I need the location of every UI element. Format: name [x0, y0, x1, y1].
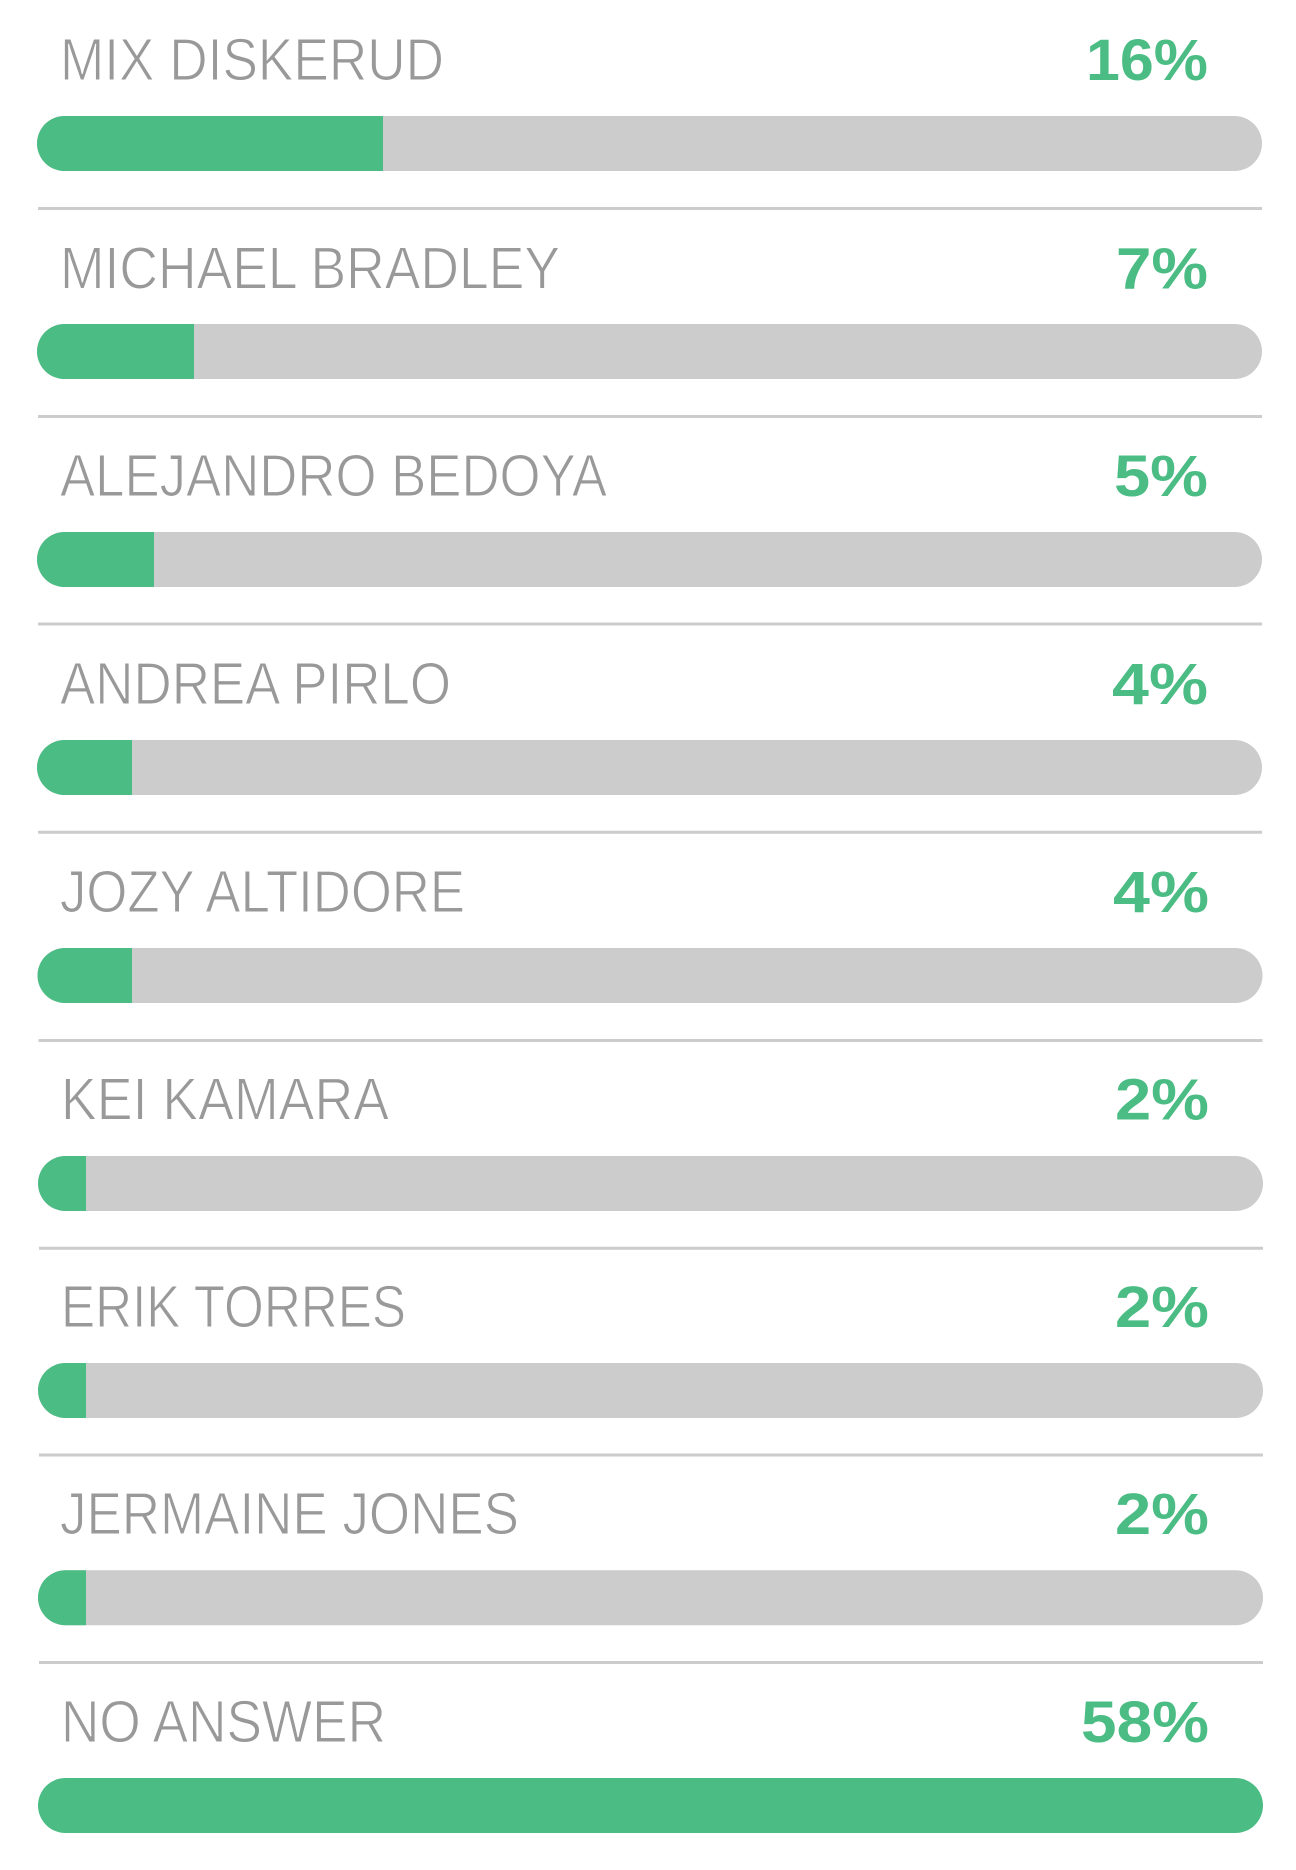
row: Mix Diskerud [37, 27, 1262, 171]
value: 2% [1115, 1275, 1209, 1340]
row: Jermaine Jones [38, 1481, 1263, 1625]
bar track [37, 532, 1262, 587]
bar fill [37, 116, 383, 171]
bar fill [37, 948, 132, 1003]
label: ERIK TORRES [61, 1274, 406, 1340]
bar track [38, 1363, 1263, 1418]
value: 2% [1115, 1068, 1209, 1132]
bar fill [38, 1778, 1263, 1833]
bar fill [38, 1363, 86, 1418]
bar track [38, 948, 1262, 1003]
label: JOZY ALTIDORE [60, 859, 465, 925]
label: NO ANSWER [61, 1689, 386, 1755]
value: 4% [1113, 860, 1209, 925]
bar fill [38, 1156, 86, 1211]
label: KEI KAMARA [61, 1066, 390, 1132]
value: 58% [1081, 1690, 1209, 1755]
value: 7% [1116, 236, 1208, 302]
bar track [38, 1156, 1263, 1211]
bar track [37, 116, 1262, 171]
row: Jozy Altidore [37, 859, 1262, 1003]
row: Alejandro Bedoya [37, 443, 1262, 587]
label: ALEJANDRO BEDOYA [60, 443, 608, 509]
row: Erik Torres [38, 1274, 1263, 1418]
label: JERMAINE JONES [60, 1481, 519, 1547]
label: MIX DISKERUD [60, 27, 444, 93]
bar track [38, 1570, 1263, 1625]
bar track [37, 740, 1262, 795]
row: Michael Bradley [37, 236, 1262, 379]
label: MICHAEL BRADLEY [60, 236, 560, 302]
row: No Answer [38, 1689, 1263, 1833]
row: Kei Kamara [38, 1066, 1263, 1211]
label: ANDREA PIRLO [60, 651, 451, 717]
bar fill [38, 1570, 86, 1625]
row: Andrea Pirlo [37, 651, 1262, 795]
value: 4% [1112, 652, 1208, 717]
value: 5% [1114, 444, 1208, 509]
bar track [37, 324, 1262, 379]
value: 2% [1115, 1482, 1209, 1547]
bar fill [37, 740, 132, 795]
value: 16% [1086, 28, 1208, 93]
bar fill [37, 324, 194, 379]
bar fill [37, 532, 154, 587]
